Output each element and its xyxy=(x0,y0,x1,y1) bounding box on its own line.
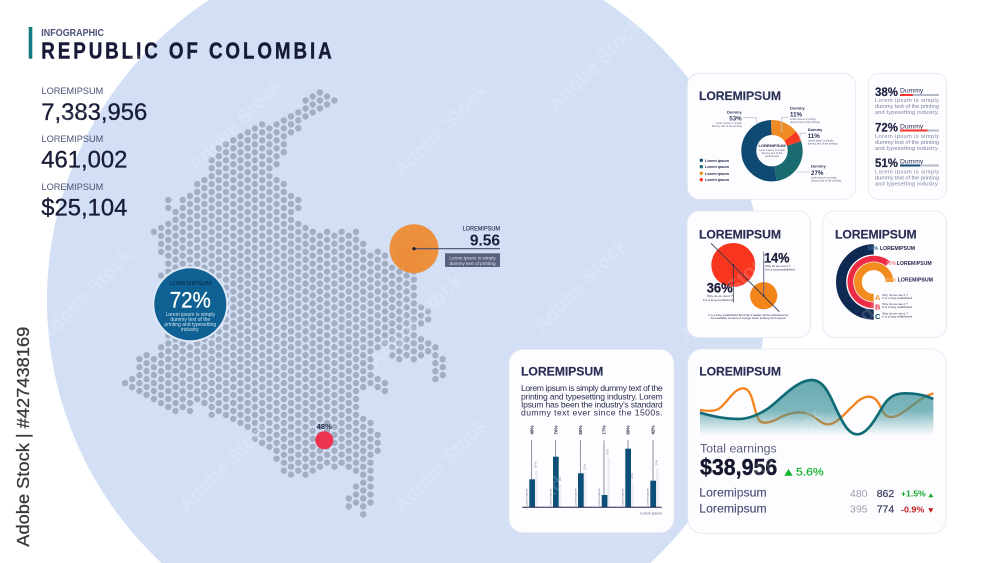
label 53% xyxy=(712,110,742,128)
donut centre label: dummy text of the xyxy=(762,151,783,155)
panel: bar chart xyxy=(509,349,674,533)
label 11% top xyxy=(790,106,820,124)
caption xyxy=(708,313,789,320)
key statistics xyxy=(41,86,147,222)
watermarks: Adobe Stock xyxy=(175,414,277,517)
key C: It is a long established xyxy=(882,315,912,319)
background circle xyxy=(47,0,765,563)
key B: It is a long established xyxy=(882,305,912,309)
small bar values: 16% xyxy=(630,473,634,479)
subtitle: INFOGRAPHIC xyxy=(41,27,104,39)
radial label 70%: LOREMIPSUM xyxy=(897,261,932,267)
callout: orange circle 9.56: LOREMIPSUM xyxy=(463,226,500,233)
stat 2 xyxy=(41,134,127,174)
donut legend: Lorem ipsum xyxy=(705,171,729,176)
label 27%: Dummy xyxy=(811,164,826,168)
key C: Why do we use it ? xyxy=(882,311,908,315)
callout: blue circle 72%: Lorem ipsum is simply xyxy=(166,312,216,318)
callout: orange circle 9.56: 9.56 xyxy=(470,233,500,250)
panel: bubble comparison xyxy=(687,211,811,338)
row 72%: 72% xyxy=(875,123,898,135)
row 38%: and typesetting industry. xyxy=(875,110,939,116)
percentage labels: 80% xyxy=(626,425,631,435)
percentage labels: 17% xyxy=(602,425,607,435)
axis label: Lorem ipsum xyxy=(640,511,662,515)
table row 1: 862 xyxy=(877,488,894,500)
line chart xyxy=(700,380,933,436)
small bar values: 37% xyxy=(654,460,658,466)
value 36% xyxy=(703,279,733,302)
row 72%: Dummy xyxy=(900,123,924,130)
panel: radial bars xyxy=(823,211,947,338)
donut connectors xyxy=(744,117,810,172)
table row 1: Loremipsum xyxy=(699,486,767,500)
donut legend: Lorem ipsum xyxy=(705,164,729,169)
row 51% xyxy=(875,158,939,187)
percentage labels: 76% xyxy=(553,425,558,435)
callout: blue circle 72%: LOREMIPSUM xyxy=(169,281,211,287)
stat 1: 7,383,956 xyxy=(41,99,147,126)
table row 2 xyxy=(699,501,933,516)
label 27%: 27% xyxy=(811,170,824,177)
watermarks: Adobe Stock xyxy=(535,404,637,507)
panel: percentage bars xyxy=(868,73,947,199)
donut centre label: Lorem ipsum is simply xyxy=(759,148,786,152)
rotated bar names xyxy=(524,488,650,506)
watermarks: Adobe Stock xyxy=(845,414,947,517)
row 38%: 38% xyxy=(875,87,898,99)
table row 2: -0.9% xyxy=(901,505,924,514)
panel: earnings line chart xyxy=(688,349,946,533)
watermarks: Adobe Stock xyxy=(390,79,492,182)
donut xyxy=(749,127,795,174)
donut centre label: printing and xyxy=(765,154,779,158)
stat 2: 461,002 xyxy=(41,147,127,174)
radial label 80%: 80% xyxy=(886,278,896,284)
value 36%: Why do we use it ? xyxy=(707,294,733,298)
rotated bar names: Lorem ipsum xyxy=(524,488,528,506)
stat 1 xyxy=(41,86,147,126)
label 11% top: Lorem ipsum is simply xyxy=(790,117,816,121)
stock credit: Adobe Stock | #427438169 xyxy=(13,327,33,547)
growth indicator xyxy=(784,467,824,479)
radial label 80%: LOREMIPSUM xyxy=(898,278,933,284)
donut legend: Lorem ipsum xyxy=(705,158,729,163)
rotated bar names: Lorem ipsum xyxy=(621,488,625,506)
label 53%: Dummy xyxy=(727,110,742,114)
callout: orange circle 9.56: dummy text of printing xyxy=(449,261,496,266)
label 27% xyxy=(811,164,841,182)
paragraph: printing and typesetting industry. Lorem xyxy=(521,391,663,401)
key C: C xyxy=(875,312,881,321)
paragraph xyxy=(521,383,663,418)
key B: B xyxy=(875,302,881,312)
title: REPUBLIC OF COLOMBIA xyxy=(41,38,332,64)
value 14% xyxy=(764,249,795,272)
label 11% middle: Lorem ipsum is simply xyxy=(808,138,834,142)
row 72%: dummy text of the printing xyxy=(875,140,939,146)
watermarks: Adobe Stock xyxy=(45,44,147,147)
small bar values: 30% xyxy=(533,462,537,468)
key C xyxy=(875,311,912,321)
watermarks: Adobe Stock xyxy=(545,14,647,117)
navy bars xyxy=(529,449,656,507)
watermarks: Adobe Stock xyxy=(365,269,467,372)
watermarks: Adobe Stock xyxy=(725,404,827,507)
stat 3 xyxy=(41,182,127,222)
panel title: LOREMIPSUM xyxy=(699,365,781,379)
panel: donut chart xyxy=(687,73,856,199)
stat 1: LOREMIPSUM xyxy=(42,86,103,96)
label 53%: Lorem ipsum is simply xyxy=(716,121,742,125)
paragraph: Lorem ipsum is simply dummy text of the xyxy=(521,383,663,393)
row 72% xyxy=(875,123,939,152)
earnings value: $38,956 xyxy=(700,454,777,480)
label 11% middle xyxy=(808,127,838,146)
value 14%: Why do we use it ? xyxy=(765,264,791,268)
row 51%: and typesetting industry. xyxy=(875,181,939,187)
radial arcs xyxy=(841,249,890,315)
callout: red marker 48%: 48% xyxy=(317,422,332,431)
value 36%: It is a long established xyxy=(703,298,733,302)
light bars xyxy=(535,458,659,507)
watermarks: Adobe Stock xyxy=(530,234,632,337)
label 11% top: dummy text of the printing xyxy=(790,120,820,124)
small bar values xyxy=(533,449,658,481)
row 51%: dummy text of the printing xyxy=(875,175,939,181)
radial label 50%: 50% xyxy=(868,246,878,252)
thin lines xyxy=(532,440,653,507)
key A: Why do we use it ? xyxy=(882,293,908,297)
callout: blue circle 72%: industry. xyxy=(181,327,200,333)
total earnings: Total earnings xyxy=(700,444,777,456)
key B xyxy=(875,302,912,312)
accent bar xyxy=(29,27,32,59)
watermarks: Adobe Stock xyxy=(685,64,787,167)
watermarks: Adobe Stock xyxy=(845,234,947,337)
panel title: LOREMIPSUM xyxy=(699,227,781,241)
radial label 50%: LOREMIPSUM xyxy=(880,246,915,252)
value 14%: 14% xyxy=(764,249,790,265)
dotted map of Colombia xyxy=(125,92,443,515)
table row 2: Loremipsum xyxy=(699,501,767,515)
key A xyxy=(875,293,912,302)
row 38%: dummy text of the printing xyxy=(875,104,939,110)
watermarks: Adobe Stock xyxy=(185,74,287,177)
panel title: LOREMIPSUM xyxy=(835,227,917,241)
percentage labels: 50% xyxy=(578,425,583,435)
row 38% xyxy=(875,87,939,116)
header xyxy=(29,27,332,64)
red bubble xyxy=(711,243,755,287)
label 53%: dummy text of the printing xyxy=(712,124,742,128)
value 36%: 36% xyxy=(707,279,733,295)
row 51%: 51% xyxy=(875,158,898,170)
watermarks: Adobe Stock xyxy=(35,244,137,347)
label 11% middle: dummy text of the printing xyxy=(808,142,838,146)
donut centre label xyxy=(758,143,786,158)
paragraph: Ipsum has been the industry's standard xyxy=(521,399,663,409)
caption: the readable content of a page when looking at its layout. xyxy=(710,316,786,320)
key B: Why do we use it ? xyxy=(882,302,908,306)
callout: blue circle 72%: 72% xyxy=(170,287,211,312)
watermarks: Adobe Stock xyxy=(675,244,777,347)
label 11% top: 11% xyxy=(790,112,803,118)
row 72%: Lorem ipsum is simply xyxy=(875,134,939,140)
watermarks: Adobe Stock xyxy=(390,414,492,517)
callout: blue circle 72% xyxy=(152,266,228,342)
rotated bar names: Lorem ipsum xyxy=(597,488,601,506)
percentage labels: 48% xyxy=(529,425,534,435)
table row 1 xyxy=(699,486,933,500)
percentage labels: 42% xyxy=(651,425,656,435)
label 11% top: Dummy xyxy=(790,106,805,110)
label 27%: Lorem ipsum is simply xyxy=(811,176,837,180)
radial label 70%: 70% xyxy=(886,261,896,267)
callout: blue circle 72%: dummy text of the xyxy=(170,317,210,323)
percentage labels xyxy=(529,425,656,435)
leader lines xyxy=(711,243,779,312)
orange bubble xyxy=(750,282,777,309)
callout: orange circle 9.56 xyxy=(390,224,500,273)
donut centre label: LOREMIPSUM xyxy=(758,143,786,148)
panel title: LOREMIPSUM xyxy=(521,365,603,379)
row 38%: Lorem ipsum is simply xyxy=(875,98,939,104)
axis xyxy=(522,506,662,508)
caption: It is a long established fact that a reader will be distracted by xyxy=(708,313,789,317)
paragraph: dummy text ever since the 1500s. xyxy=(521,408,663,418)
panel title: LOREMIPSUM xyxy=(699,89,781,103)
value 14%: It is a long established xyxy=(765,268,795,272)
row 72%: and typesetting industry. xyxy=(875,146,939,152)
rotated bar names: Lorem ipsum xyxy=(573,488,577,506)
stat 2: LOREMIPSUM xyxy=(42,134,103,144)
small bar values: 71% xyxy=(606,449,610,455)
callout: orange circle 9.56: Lorem ipsum is simply xyxy=(449,256,496,261)
label 11% middle: Dummy xyxy=(808,127,823,132)
donut legend: Lorem ipsum xyxy=(705,177,729,182)
small bar values: 31% xyxy=(582,464,586,470)
table row 2: 395 xyxy=(850,504,868,516)
stat 3: $25,104 xyxy=(41,195,127,222)
table row 1: +1.5% xyxy=(901,490,926,498)
rotated bar names: Lorem ipsum xyxy=(646,488,650,506)
label 27%: dummy text of the printing xyxy=(811,178,841,182)
rotated bar names: Lorem ipsum xyxy=(548,488,552,506)
callout: red marker 48% xyxy=(315,422,333,449)
table row 1: 480 xyxy=(850,488,868,500)
row 51%: Dummy xyxy=(900,158,924,165)
key A: A xyxy=(875,293,881,302)
stat 3: LOREMIPSUM xyxy=(42,182,103,192)
watermarks: Adobe Stock xyxy=(825,14,927,117)
callout: blue circle 72%: printing and typesetting xyxy=(164,322,216,328)
row 38%: Dummy xyxy=(900,88,924,95)
row 51%: Lorem ipsum is simply xyxy=(875,169,939,175)
key A: It is a long established xyxy=(882,296,912,300)
label 53%: 53% xyxy=(729,116,742,122)
growth indicator: 5.6% xyxy=(796,467,824,479)
small bar values: 9% xyxy=(558,477,562,481)
label 11% middle: 11% xyxy=(808,133,820,140)
table row 2: 774 xyxy=(877,504,894,516)
donut legend xyxy=(700,158,729,182)
